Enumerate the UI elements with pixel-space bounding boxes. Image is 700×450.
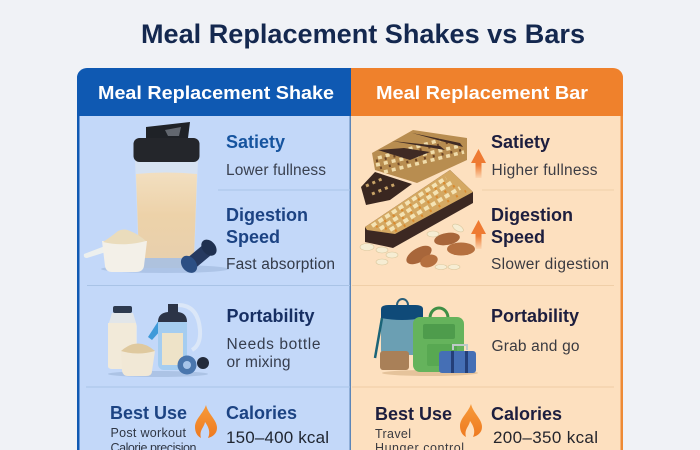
- shake header: Meal Replacement Shake: [98, 82, 334, 103]
- digestion row: Fast absorption: [226, 256, 335, 273]
- digestion row: [491, 205, 609, 273]
- digestion row: Speed: [491, 227, 545, 247]
- icon: shaker bottle with scoop and blender ball: [84, 122, 229, 276]
- oats: [360, 222, 465, 270]
- calories block: Calories: [226, 403, 297, 423]
- best use block: Travel: [375, 427, 411, 441]
- best use block: [110, 403, 197, 450]
- digestion row: [226, 205, 335, 273]
- best use block: Post workout: [110, 426, 187, 440]
- icon: flame: [460, 404, 482, 437]
- calories block: [226, 406, 328, 443]
- icon: portability bottles: [108, 304, 209, 377]
- calories block: [492, 406, 597, 443]
- satiety row: Higher fullness: [492, 162, 598, 179]
- digestion row: Digestion: [491, 205, 573, 225]
- calories block: Calories: [491, 404, 562, 424]
- arrow: satiety up: [471, 149, 486, 178]
- title: Meal Replacement Shakes vs Bars: [141, 19, 585, 49]
- satiety row: Satiety: [226, 132, 285, 152]
- panel: bar: [351, 68, 623, 450]
- calories block: 150–400 kcal: [226, 428, 329, 447]
- digestion row: Speed: [226, 227, 280, 247]
- portability row: Grab and go: [492, 338, 580, 355]
- best use block: Best Use: [375, 404, 452, 424]
- portability row: [226, 306, 320, 371]
- satiety row: Satiety: [491, 132, 550, 152]
- digestion row: Digestion: [226, 205, 308, 225]
- bar header: Meal Replacement Bar: [376, 82, 588, 103]
- back bar: [361, 172, 412, 205]
- portability row: Needs bottle: [226, 336, 320, 353]
- satiety row: [226, 134, 326, 175]
- blender ball: [180, 240, 217, 273]
- bar header: [351, 68, 623, 116]
- best use block: [375, 404, 464, 450]
- top bar: [372, 130, 467, 183]
- panel: shake: [77, 68, 351, 450]
- arrow: digestion up: [471, 220, 486, 249]
- front bar: [365, 170, 473, 248]
- shake header: [77, 68, 351, 116]
- best use block: Best Use: [110, 403, 187, 423]
- almonds: [406, 232, 475, 268]
- satiety row: Lower fullness: [226, 162, 326, 179]
- icon: snack bars and almonds: [360, 130, 475, 270]
- satiety row: [491, 132, 598, 179]
- portability row: or mixing: [226, 354, 290, 371]
- digestion row: Slower digestion: [491, 256, 609, 273]
- icon: flame: [195, 405, 217, 438]
- icon: bags: [375, 299, 478, 376]
- portability row: Portability: [491, 306, 579, 326]
- scoop: [84, 230, 147, 272]
- portability row: Portability: [226, 306, 315, 326]
- calories block: 200–350 kcal: [493, 428, 598, 447]
- comparison card: [77, 68, 623, 450]
- portability row: [491, 306, 580, 355]
